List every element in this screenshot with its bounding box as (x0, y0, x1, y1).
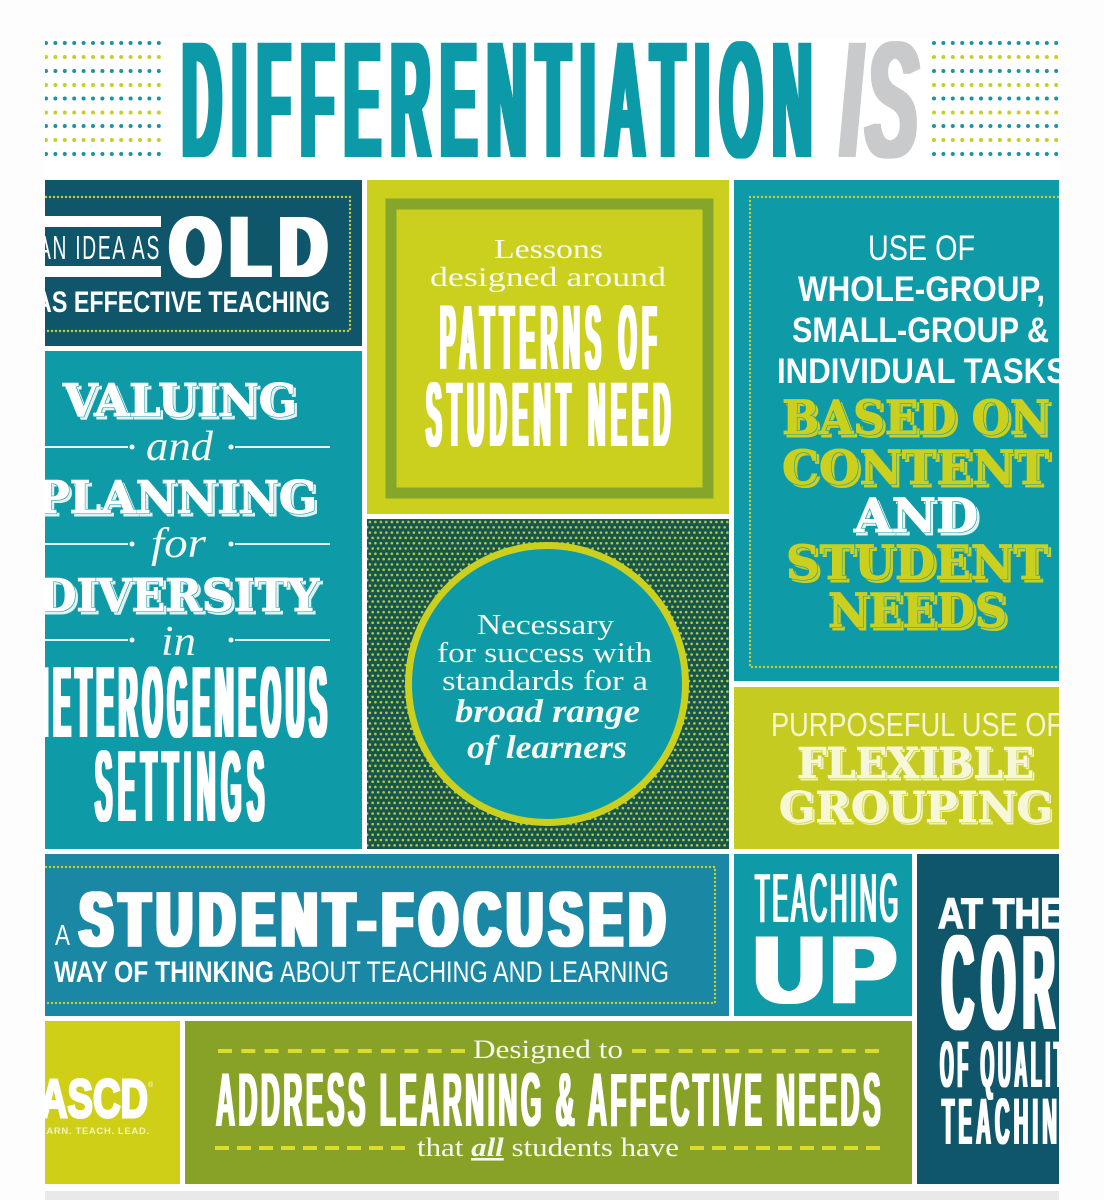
panel: address learning and affective needs (185, 1021, 912, 1184)
panel: student-focused: A (55, 920, 71, 952)
panel: use of whole-group, small-group and individual tasks: CONTENT (782, 441, 1049, 496)
dot pattern: left of title (46, 43, 160, 154)
panel: teaching up: UP (754, 917, 902, 1022)
panel: an idea as old: AN IDEA AS (38, 229, 161, 266)
panel: valuing and planning for diversity: DIVERSITY (38, 569, 320, 622)
panel: student-focused: WAY OF THINKING (54, 956, 274, 989)
panel: valuing and planning for diversity: PLANNING (36, 471, 317, 524)
panel: ascd logo (33, 1021, 180, 1184)
panel: use of whole-group, small-group and individual tasks: INDIVIDUAL TASKS (777, 352, 1067, 391)
text: SETTINGS (95, 731, 270, 843)
panel: address learning and affective needs: Designed to (473, 1035, 623, 1064)
panel: ascd logo: LEARN. TEACH. LEAD. (33, 1126, 149, 1137)
circle text: broad range (455, 694, 640, 730)
panel: use of whole-group, small-group and individual tasks: STUDENT (786, 536, 1048, 591)
panel: use of whole-group, small-group and individual tasks: AND (853, 489, 978, 544)
circle text: Necessary (477, 609, 615, 641)
panel: use of whole-group, small-group and individual tasks: BASED ON (782, 391, 1050, 446)
panel: ascd logo: ASCD (40, 1069, 148, 1129)
panel: valuing and planning for diversity: and (146, 424, 214, 470)
circle text: standards for a (442, 665, 648, 697)
panel: an idea as old (30, 180, 362, 346)
title (182, 41, 920, 159)
panel: use of whole-group, small-group and individual tasks: SMALL-GROUP & (792, 311, 1049, 350)
panel: patterns of student need: designed around (430, 262, 667, 292)
circle text: of learners (467, 730, 627, 766)
panel: at the core (917, 854, 1059, 1184)
panel: necessary for success (367, 519, 729, 849)
panel: student-focused: STUDENT-FOCUSED (80, 877, 672, 963)
circle text (437, 609, 653, 766)
panel: use of whole-group, small-group and individual tasks: NEEDS (828, 584, 1007, 639)
panel: at the core: AT THE (938, 890, 1064, 938)
circle badge (408, 546, 686, 822)
panel: patterns of student need (367, 180, 729, 514)
panel: address learning and affective needs: that all students have (417, 1133, 679, 1162)
panel: an idea as old: OLD (170, 200, 336, 294)
dot pattern: right of title (934, 43, 1059, 154)
panel: use of whole-group, small-group and individual tasks: USE OF (868, 229, 975, 268)
panel: purposeful use of flexible grouping (734, 687, 1063, 849)
panel: student-focused (30, 854, 729, 1016)
circle text: for success with (437, 637, 653, 669)
panel: valuing and planning for diversity: for (151, 521, 207, 567)
panel: purposeful use of flexible grouping: GROUPING (779, 783, 1053, 832)
panel: patterns of student need: Lessons (494, 234, 603, 264)
panel: ascd logo: ® (148, 1081, 154, 1089)
text: IS (840, 8, 922, 193)
panel: an idea as old: AS EFFECTIVE TEACHING (35, 286, 330, 319)
panel: valuing and planning for diversity (30, 351, 362, 849)
panel: purposeful use of flexible grouping: FLEXIBLE (797, 739, 1034, 788)
panel: use of whole-group, small-group and individual tasks: WHOLE-GROUP, (798, 270, 1045, 309)
panel: valuing and planning for diversity: in (161, 619, 196, 665)
panel: use of whole-group, small-group and individual tasks (734, 180, 1090, 681)
panel: teaching up (734, 854, 912, 1022)
panel: student-focused: ABOUT TEACHING AND LEARNING (280, 956, 669, 989)
panel: valuing and planning for diversity: VALUING (62, 374, 297, 427)
